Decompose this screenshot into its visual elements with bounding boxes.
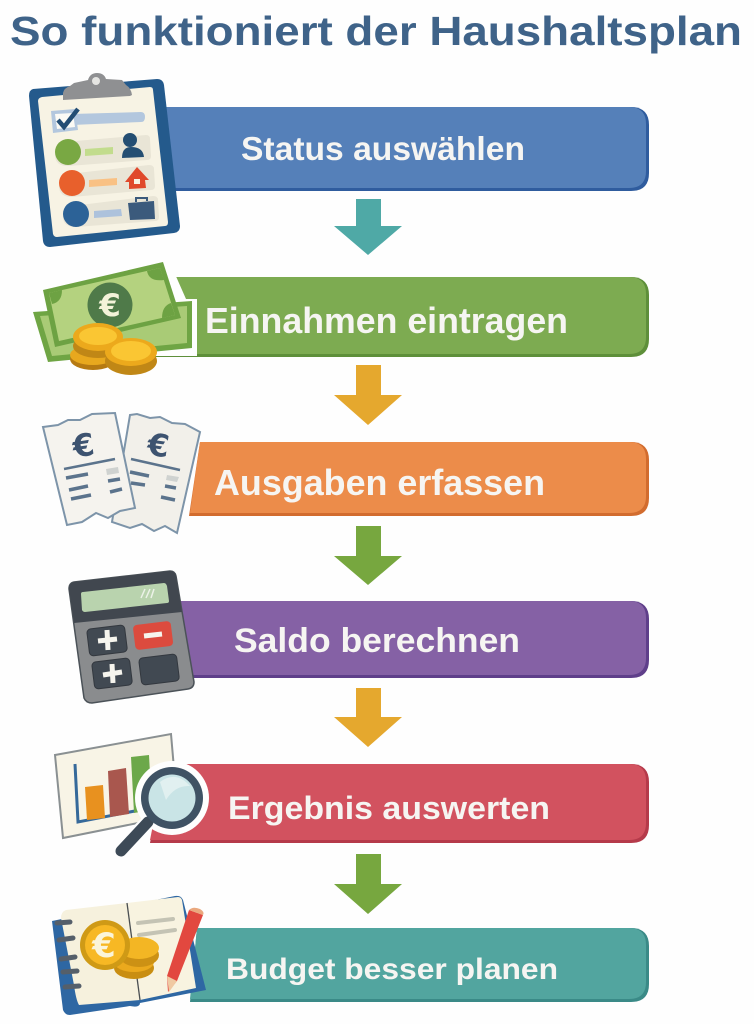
arrow: gold [334, 688, 402, 747]
icon: receipts [43, 413, 200, 533]
bar: purple [175, 601, 649, 678]
bar: green [150, 277, 649, 357]
arrow: green [334, 854, 402, 914]
icon: notebook with coins and pencil: € [91, 926, 116, 966]
step 3: Ausgaben erfassen [43, 413, 649, 533]
icon: notebook with coins and pencil [52, 896, 206, 1015]
icon: chart with magnifier [55, 734, 209, 852]
label: Saldo berechnen [234, 622, 520, 660]
bar: orange [189, 442, 649, 516]
label: Ausgaben erfassen [214, 462, 545, 503]
arrow: gold [334, 365, 402, 425]
icon: receipts: € [144, 427, 172, 465]
step 1: Status auswählen [29, 73, 649, 247]
icon: calculator [69, 571, 194, 703]
arrow: green [334, 526, 402, 585]
bar: blue [160, 107, 649, 191]
icon: receipts: € [69, 427, 97, 466]
step 5: Ergebnis auswerten [55, 734, 649, 852]
icon: banknotes and coins [33, 262, 197, 375]
step 2: Einnahmen eintragen [33, 262, 649, 375]
icon: banknotes and coins: € [98, 288, 121, 324]
step 4: Saldo berechnen [69, 571, 649, 703]
step 6: Budget besser planen [52, 896, 649, 1015]
label: Status auswählen [241, 130, 525, 167]
label: Ergebnis auswerten [228, 790, 550, 826]
arrow: teal [334, 199, 402, 255]
label: Einnahmen eintragen [205, 300, 568, 341]
label: Budget besser planen [226, 953, 558, 986]
bar: red [150, 764, 649, 843]
icon: clipboard [29, 73, 180, 247]
title: So funktioniert der Haushaltsplan [10, 8, 742, 54]
bar: teal [190, 928, 649, 1002]
